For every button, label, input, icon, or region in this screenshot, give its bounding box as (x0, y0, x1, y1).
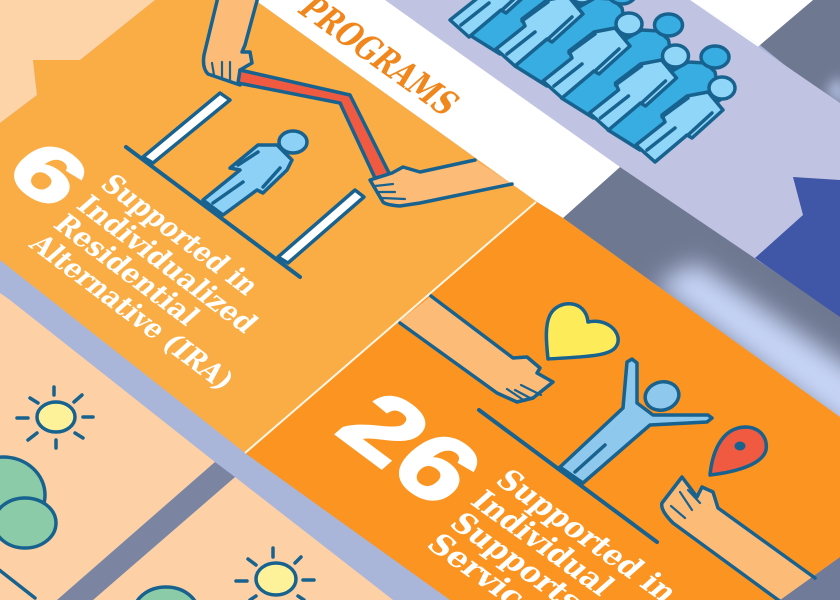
text: supported in IRA: Individualized (70, 189, 265, 339)
ground line on card A (0, 569, 35, 598)
icon: house left wall (143, 93, 230, 163)
panel: upper-left peach card (0, 0, 155, 123)
text: supported in IRA: Alternative (IRA) (22, 228, 242, 396)
panel: lavender band (385, 0, 840, 316)
divider between orange panels (245, 202, 536, 453)
icon: house right wall (278, 190, 364, 263)
shadow area: between upper and lower cards (563, 167, 840, 450)
icon: roof, red (238, 70, 390, 178)
icon: floor line, lower panel (479, 410, 657, 542)
shadow area: top right (760, 0, 840, 110)
icon: location pin (710, 427, 766, 475)
panel: lower-left peach card B (93, 477, 393, 600)
text: supported in IRA (22, 168, 266, 396)
house shape: dark blue (755, 177, 840, 317)
icon: heart (546, 304, 618, 359)
panel: lower-left peach card A (0, 293, 215, 600)
shadow strip between peach cards (57, 462, 235, 600)
icon: sun on card B (236, 548, 314, 600)
panel: supported in individual supports, orange (245, 202, 840, 600)
text: supported in IRA: Residential (47, 208, 207, 331)
icon: person in house (203, 131, 307, 215)
icon: tree on card B (134, 587, 198, 600)
panel: supported in IRA, light orange (0, 0, 537, 453)
panel: white title band (255, 0, 760, 218)
crowd of people icons (450, 0, 735, 162)
icon: arm holding roof, top (204, 0, 258, 85)
icon: sun on card A (17, 387, 93, 448)
white sheet corner: top right (690, 0, 813, 45)
icon: floor line (126, 147, 300, 277)
number 26: 26 (316, 373, 505, 524)
icon: tree on card A (0, 457, 56, 548)
shadow area: bottom right (780, 557, 840, 600)
icon: arm with hand, lower right (662, 477, 815, 600)
icon: arm with open hand, upper left (398, 296, 553, 402)
icon: person with arms raised (560, 359, 712, 483)
icon: arm holding roof, right (370, 160, 512, 206)
text: supported in IRA: Supported in (94, 168, 266, 301)
